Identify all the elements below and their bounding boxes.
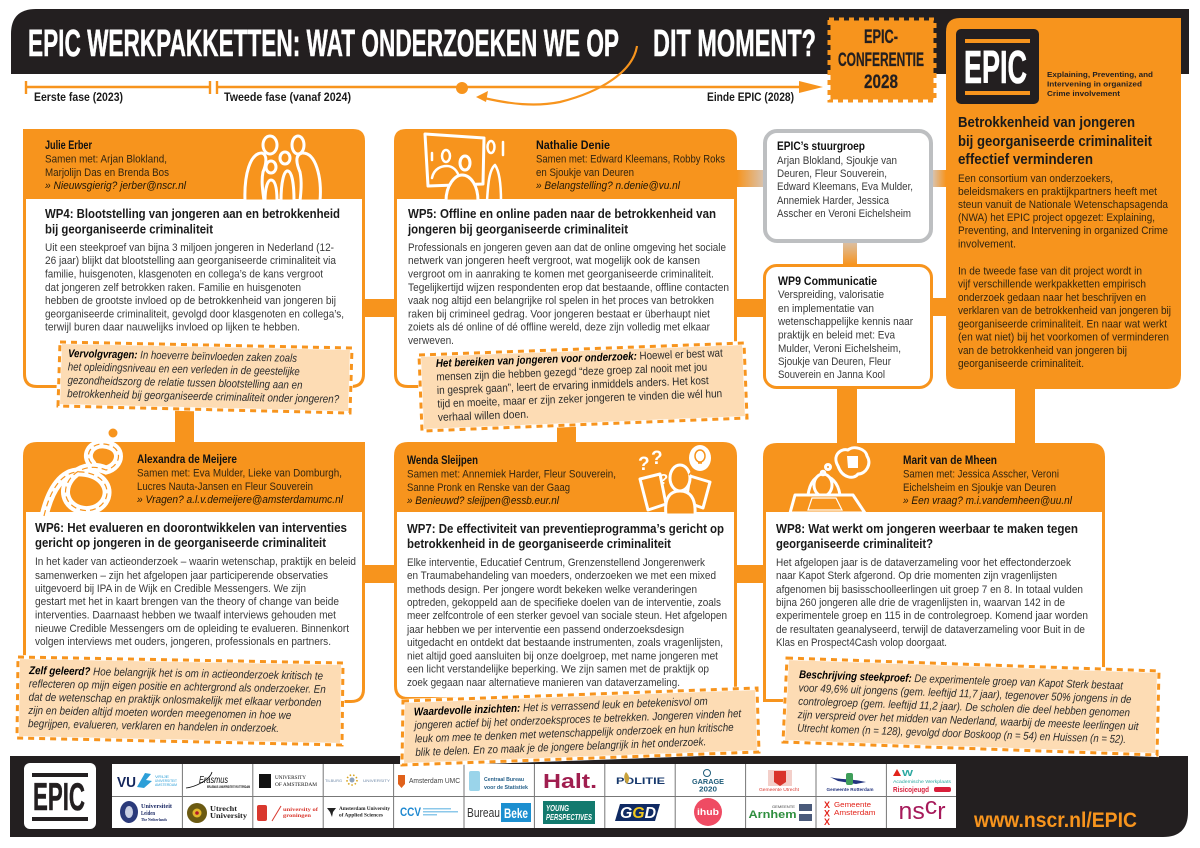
callout: WP7 valuable insights: blik te delen. En zo maak je de jongere belangrijk in het onderzoek. xyxy=(415,736,706,759)
footer bar xyxy=(10,756,1188,837)
logo: CBS: Centraal Bureau xyxy=(484,777,525,783)
conference box xyxy=(829,19,935,101)
label: second phase: Tweede fase (vanaf 2024) xyxy=(224,92,351,104)
WP4 text: familie, huisgenoten, klasgenoten en collega’s de kans vergroot xyxy=(45,269,324,281)
panel: steering group: Edward Kleemans, Eva Mulder, xyxy=(777,181,913,193)
logo: ihub: ihub xyxy=(697,807,720,817)
WP8 heading: WP8: Wat werkt om jongeren weerbaar te maken tegen xyxy=(776,521,1078,536)
logo: University of Groningen: university of xyxy=(283,807,318,813)
WP5 text: Professionals en jongeren geven aan dat de online omgeving het sociale xyxy=(408,242,726,254)
WP6 researcher xyxy=(137,454,343,506)
panel: WP9 communication: Verspreiding, valorisatie xyxy=(778,289,884,301)
logo: Bureau Beke xyxy=(467,803,531,822)
WP8 researcher xyxy=(903,455,1072,507)
panel: WP8 xyxy=(763,443,1105,702)
WP4 researcher xyxy=(45,140,186,192)
WP6 researcher: Samen met: Eva Mulder, Lieke van Domburgh, xyxy=(137,468,342,480)
panel: steering group: Deuren, Fleur Souverein, xyxy=(777,168,887,180)
conference box: 2028 xyxy=(864,71,898,93)
WP8 researcher: Marit van de Mheen xyxy=(903,455,997,467)
WP7 text: zoek gegaan naar alternatieve manieren van dataverzameling. xyxy=(407,677,680,689)
callout: WP4 follow-up questions: het opleidingsniveau en een verleden in de geestelijke xyxy=(68,361,300,378)
callout: WP4 follow-up questions xyxy=(58,342,352,413)
WP7 text: een licht verstandelijke beperking. We zijn samen met de praktijk op xyxy=(407,664,709,676)
logo: Halt: Halt. xyxy=(543,771,597,793)
conference box: CONFERENTIE xyxy=(838,49,924,71)
WP7 text: jaar hebben we per interventie een passend onderzoeksdesign xyxy=(406,624,684,636)
WP5 text: vaak nog altijd een belangrijke rol spelen in het proces van betrokken xyxy=(408,295,714,307)
WP6 heading xyxy=(35,520,347,550)
logo tagline: Intervening in organized xyxy=(1047,80,1142,88)
icon: group of young people xyxy=(245,136,320,201)
logo: CCV xyxy=(400,805,458,819)
logo: Gemeente Rotterdam xyxy=(826,773,874,792)
WP6 researcher: » Vragen? a.l.v.demeijere@amsterdamumc.nl xyxy=(137,494,343,506)
WP6 text: interventies. Daarnaast hebben we twaalf interviews gehouden met xyxy=(35,610,337,622)
logo: University of Groningen xyxy=(257,805,318,821)
callout: WP8 sample description: Utrecht komen (n = 128), gevolgd door Boskoop (n = 54) en Huissen (n = 52). xyxy=(797,723,1126,746)
logo: University of Amsterdam: OF AMSTERDAM xyxy=(275,782,317,788)
logo: VU: AMSTERDAM xyxy=(155,783,177,787)
logo: Leiden University xyxy=(120,801,172,823)
WP7 text: meer zelfcontrole of een sterker gevoel van sociale steun. Het afgelopen xyxy=(407,610,727,622)
WP5 heading: WP5: Offline en online paden naar de betrokkenheid van xyxy=(408,206,716,221)
WP4 researcher: Julie Erber xyxy=(45,140,92,152)
WP4 text: hebben de grootste invloed op de betrokkenheid van jongeren bij xyxy=(45,295,336,307)
callout: WP4 follow-up questions: betrokkenheid bij georganiseerde criminaliteit onder jongeren? xyxy=(67,388,340,406)
WP7 heading xyxy=(407,521,724,551)
WP4 researcher: Marjolijn Das en Brenda Bos xyxy=(45,167,169,179)
logo: Erasmus xyxy=(186,772,250,789)
WP4 researcher: » Nieuwsgierig? jerber@nscr.nl xyxy=(45,180,186,192)
logo: Utrecht University: Utrecht xyxy=(210,804,238,813)
WP8 text: bijna 260 jongeren alle drie de vragenlijsten in, waarvan 142 in de xyxy=(776,597,1065,609)
logo: Gemeente Amsterdam: X xyxy=(824,808,830,818)
intro text: georganiseerde criminaliteit. En naar wat werkt xyxy=(958,318,1168,330)
WP4 heading xyxy=(45,206,340,236)
logo: Gemeente Amsterdam xyxy=(824,800,876,827)
logo: Young Perspectives: YOUNG xyxy=(546,803,569,813)
WP5 text xyxy=(408,242,729,347)
WP4 text xyxy=(45,242,344,334)
callout: WP5 reaching young people: mensen zijn die hebben gezegd “deze groep zal nooit met jou xyxy=(436,362,707,383)
logo: Amsterdam UMC xyxy=(398,775,460,788)
logo: Gemeente Amsterdam: Gemeente xyxy=(834,800,871,809)
intro text: (en wat niet) bij het voorkomen of verminderen xyxy=(958,332,1169,344)
panel: steering group: EPIC’s stuurgroep xyxy=(777,141,865,153)
intro text: beleidsmakers en praktijkpartners heeft met xyxy=(958,186,1158,198)
title: EPIC WERKPAKKETTEN: WAT ONDERZOEKEN WE OP xyxy=(28,23,619,65)
icon: video call xyxy=(425,134,503,201)
logo: VU: UNIVERSITEIT xyxy=(155,779,178,783)
logo: Academische Werkplaats Risicojeugd: Academische Werkplaats xyxy=(893,779,952,784)
logo: Gemeente Utrecht xyxy=(759,770,800,793)
intro text: Preventing, and Intervening in organized Crime xyxy=(958,225,1168,237)
WP7 text: optreden, gekoppeld aan de specifieke doelen van de interventie, zoals xyxy=(407,597,721,609)
icon: person thinking of strength xyxy=(790,448,869,513)
WP8 text: de resultaten geanalyseerd, terwijl de dataverzameling voor Buit in de xyxy=(776,624,1085,636)
intro text: steun vanuit de Nationale Wetenschapsagenda xyxy=(958,199,1169,211)
logo: VU xyxy=(117,773,178,791)
logo: University of Amsterdam: UNIVERSITY xyxy=(275,775,306,781)
callout: WP6 lessons learned: Zelf geleerd? Hoe belangrijk het is om in actieonderzoek kritisch te xyxy=(28,665,323,683)
timeline: first phase line xyxy=(26,81,210,94)
WP8 text: Het afgelopen jaar is de dataverzameling voor het effectonderzoek xyxy=(776,557,1071,569)
panel: WP7 xyxy=(394,442,737,700)
WP6 text: In het kader van actieonderzoek – waarin wetenschap, praktijk en beleid xyxy=(35,556,356,568)
logo: Utrecht University: University xyxy=(210,811,247,820)
logo: ihub xyxy=(694,798,722,826)
logo: Young Perspectives xyxy=(543,801,595,824)
panel: project introduction xyxy=(946,18,1181,389)
WP4 heading: bij georganiseerde criminaliteit xyxy=(45,222,214,236)
callout: WP6 lessons learned: zijn en beiden altijd moeten worden meegenomen in hoe we xyxy=(27,705,291,722)
callout: WP6 lessons learned: dat de wetenschap en praktijk onlosmakelijk met elkaar verbonden xyxy=(28,692,322,709)
logo: Leiden University: Leiden xyxy=(141,811,156,817)
WP5 researcher xyxy=(536,140,725,192)
WP4 heading: WP4: Blootstelling van jongeren aan en betrokkenheid xyxy=(45,206,340,221)
WP6 heading: gericht op jongeren in de georganiseerde criminaliteit xyxy=(35,535,327,550)
logo: Bureau Beke: Bureau xyxy=(467,805,500,820)
intro heading: effectief verminderen xyxy=(958,152,1093,168)
logo: Young Perspectives: PERSPECTIVES xyxy=(546,812,592,822)
callout: WP6 lessons learned xyxy=(17,657,343,745)
callout: WP7 valuable insights: jongeren actief bij het onderzoeksproces te betrekken. Jongeren vinden het xyxy=(412,708,742,732)
logo: Gemeente Amsterdam: X xyxy=(824,800,830,810)
intro text: In de tweede fase van dit project wordt in xyxy=(958,266,1142,278)
WP6 text: uitgevoerd bij IPA in de Wijk en Credible Messengers. We zijn xyxy=(35,583,306,595)
WP5 text: netwerk van jongeren heeft vergroot, wat mogelijk ook de kansen xyxy=(408,255,700,267)
title: DIT MOMENT? xyxy=(653,23,816,65)
WP4 researcher: Samen met: Arjan Blokland, xyxy=(45,154,167,166)
panel: WP9 communication: wetenschappelijke kennis naar xyxy=(777,316,913,328)
WP8 text: experimentele groep en 115 in de controlegroep. Komend jaar worden xyxy=(776,610,1088,622)
callout: WP8 sample description: zijn verspreid over het midden van Nederland, waarbij de meeste leerlingen uit xyxy=(797,709,1139,733)
WP8 researcher: » Een vraag? m.i.vandemheen@uu.nl xyxy=(903,495,1072,507)
WP8 text: naar Kapot Sterk afgerond. Op drie momenten zijn vragenlijsten xyxy=(776,570,1057,582)
callout: WP4 follow-up questions: gezondheidszorg de relatie tussen blootstelling aan en xyxy=(67,375,303,392)
title bar xyxy=(11,9,1189,74)
intro text: verklaren van de betrokkenheid van jongeren bij xyxy=(958,305,1171,317)
WP8 heading: georganiseerde criminaliteit? xyxy=(776,536,933,551)
WP5 heading xyxy=(407,206,716,236)
WP5 researcher: en Sjoukje van Deuren xyxy=(536,167,634,179)
logo: Arnhem xyxy=(748,804,812,821)
logo: Bureau Beke: Beke xyxy=(504,805,528,821)
footer EPIC logo: EPIC xyxy=(33,776,85,819)
WP7 researcher xyxy=(407,455,616,507)
logo: Garage 2020 xyxy=(692,770,724,794)
panel: WP9 communication: Sjoukje van Deuren, Fleur xyxy=(778,356,891,368)
timeline: current moment dot xyxy=(456,82,468,94)
logo: GGD: GGD xyxy=(620,805,656,822)
icon: person with questions and idea: ? xyxy=(651,448,663,469)
callout: WP7 valuable insights: Waardevolle inzichten: Het is verrassend leuk en betekenisvol om xyxy=(414,696,708,718)
WP8 researcher: Samen met: Jessica Asscher, Veroni xyxy=(903,469,1059,481)
icon: looping road xyxy=(44,428,118,516)
WP6 text: gestart met het in kaart brengen van the theory of change van beide xyxy=(35,596,339,608)
intro text: involvement. xyxy=(958,238,1016,250)
logo: NSCR: ns xyxy=(898,798,924,825)
logo: Arnhem: Arnhem xyxy=(748,809,797,821)
panel: WP5 xyxy=(394,129,737,388)
WP6 text: nieuwe Credible Messengers om de opleiding te evalueren. Binnenkort xyxy=(35,623,350,635)
callout: WP8 sample description: controlegroep (gem. leeftijd 11,2 jaar). De scholen die deel hebben genomen xyxy=(798,696,1130,719)
callout: WP8 sample description: Beschrijving steekproef: De experimentele groep van Kapot Sterk bestaat xyxy=(799,669,1124,692)
WP6 researcher: Alexandra de Meijere xyxy=(137,454,237,466)
logo: Erasmus: Erasmus xyxy=(199,775,228,786)
logo: Erasmus: ERASMUS UNIVERSITEIT ROTTERDAM xyxy=(207,785,250,789)
logo: Amsterdam UMC: Amsterdam UMC xyxy=(409,776,460,785)
WP7 text: Elke interventie, Educatief Centrum, Grenzenstellend Jongerenwerk xyxy=(407,557,705,569)
logo: NSCR: c xyxy=(925,793,937,820)
logo: Tilburg University: UNIVERSITY xyxy=(363,779,391,783)
logo tagline: Explaining, Preventing, and xyxy=(1047,70,1153,79)
logo: Arnhem: GEMEENTE xyxy=(772,805,796,809)
panel: steering group: Annemiek Harder, Jessica xyxy=(777,195,890,207)
logo: Gemeente Amsterdam: Amsterdam xyxy=(834,808,876,817)
logo: CCV: CCV xyxy=(400,805,421,819)
intro text: (NWA) het EPIC project opgezet: Explaining, xyxy=(958,212,1155,224)
logo tagline: Crime involvement xyxy=(1047,89,1120,98)
WP7 researcher: Sanne Pronk en Renske van der Gaag xyxy=(407,482,570,494)
panel: WP6 xyxy=(23,428,365,703)
curved arrow head xyxy=(476,91,488,102)
WP7 researcher: Samen met: Annemiek Harder, Fleur Souverein, xyxy=(407,469,616,481)
callout: WP4 follow-up questions: Vervolgvragen: In hoeverre beïnvloeden zaken zoals xyxy=(68,348,297,365)
WP4 text: 26 jaar) blijkt dat blootstelling aan georganiseerde criminaliteit via xyxy=(45,255,337,267)
WP8 text: Klas en Prospect4Cash volop doorgaat. xyxy=(776,637,947,649)
WP4 text: georganiseerde criminaliteit, gevolgd door klasgenoten en collega’s, xyxy=(45,309,344,321)
WP5 researcher: » Belangstelling? n.denie@vu.nl xyxy=(536,180,680,192)
WP7 text: uitgedacht en ontdekt dat bestaande instrumenten, zoals vragenlijsten, xyxy=(407,637,723,649)
WP7 researcher: » Benieuwd? sleijpen@essb.eur.nl xyxy=(407,495,559,507)
panel: WP9 communication: en implementatie van xyxy=(778,303,874,315)
intro text: van de betrokkenheid van jongeren bij xyxy=(958,345,1127,357)
callout: WP6 lessons learned: begrijpen, evalueren, verklaren en handelen in onderzoek. xyxy=(28,718,279,735)
WP6 text xyxy=(35,556,356,648)
timeline: arrow head to conference xyxy=(799,81,823,93)
panel: steering group: Arjan Blokland, Sjoukje van xyxy=(777,155,897,167)
logo: Academische Werkplaats Risicojeugd: Risicojeugd xyxy=(893,787,929,794)
EPIC logo xyxy=(956,29,1039,104)
WP5 text: Tegelijkertijd wijzen respondenten erop dat bestaande, offline contacten xyxy=(408,282,729,294)
WP6 heading: WP6: Het evalueren en doorontwikkelen van interventies xyxy=(35,520,347,535)
WP6 text: volgen interviews met ouders, jongeren, professionals en partners. xyxy=(35,636,331,648)
callout: WP5 reaching young people: verhaal willen doen. xyxy=(438,409,529,424)
intro text: Een consortium van onderzoekers, xyxy=(958,173,1113,185)
callout: WP7 valuable insights xyxy=(402,688,759,765)
callout: WP5 reaching young people xyxy=(419,343,747,431)
WP7 text: en Traumabehandeling van moeders, onderzoeken we met een mixed xyxy=(407,570,716,582)
logo: Amsterdam University of Applied Sciences: of Applied Sciences xyxy=(339,814,383,818)
callout: WP8 sample description: voor 49,6% uit jongens (gem. leeftijd 11,7 jaar), tegenover 50% jongens in de xyxy=(798,682,1132,706)
website link: www.nscr.nl/EPIC xyxy=(973,809,1137,832)
EPIC logo: EPIC xyxy=(964,41,1027,93)
logo: VU: VU xyxy=(117,774,136,791)
callout: WP5 reaching young people: Het bereiken van jongeren voor onderzoek: Hoewel er best wat xyxy=(436,347,724,370)
logo: Politie xyxy=(616,772,665,787)
label: first phase: Eerste fase (2023) xyxy=(34,92,123,104)
logo: Utrecht University xyxy=(187,803,247,823)
logo: CBS: voor de Statistiek xyxy=(484,785,529,791)
logo: Gemeente Utrecht: Gemeente Utrecht xyxy=(759,787,800,793)
intro heading: Betrokkenheid van jongeren xyxy=(958,115,1135,131)
panel: WP9 communication xyxy=(764,266,932,388)
logo: Politie: POLITIE xyxy=(616,776,665,787)
panel: steering group xyxy=(765,131,931,241)
WP7 heading: WP7: De effectiviteit van preventieprogramma’s gericht op xyxy=(407,521,724,536)
logo: VU: VRIJE xyxy=(155,775,170,779)
WP5 text: zoiets als dé online of dé offline wereld, deze zijn volledig met elkaar xyxy=(408,322,710,334)
logo: Tilburg University: TILBURG xyxy=(325,779,342,783)
logo: Leiden University: Universiteit xyxy=(141,804,172,810)
panel: WP9 communication: Mulder, Veroni Eichelsheim, xyxy=(778,343,901,355)
timeline xyxy=(26,46,823,105)
WP5 researcher: Nathalie Denie xyxy=(536,140,610,152)
panel: steering group: Asscher en Veroni Eichelsheim xyxy=(777,208,911,220)
label: end: Einde EPIC (2028) xyxy=(707,92,794,104)
logo: Gemeente Rotterdam: Gemeente Rotterdam xyxy=(826,787,874,792)
WP6 researcher: Lucres Nauta-Jansen en Fleur Souverein xyxy=(137,481,313,493)
WP7 researcher: Wenda Sleijpen xyxy=(407,455,478,467)
WP5 heading: jongeren bij georganiseerde criminaliteit xyxy=(407,222,629,236)
curved arrow pointing to now xyxy=(484,46,637,105)
logo: Garage 2020: GARAGE xyxy=(692,777,724,786)
WP6 text: samenwerken – zijn het afgelopen jaar participerende observaties xyxy=(35,570,328,582)
intro heading xyxy=(958,115,1152,168)
logo: CBS xyxy=(469,771,529,791)
logo: Academische Werkplaats Risicojeugd: W xyxy=(902,769,914,778)
partner logos xyxy=(112,764,956,828)
connectors between panels xyxy=(175,170,1035,583)
conference box: EPIC- xyxy=(864,26,898,48)
footer EPIC logo xyxy=(24,763,96,829)
logo: Garage 2020: 2020 xyxy=(699,784,717,794)
logo: University of Groningen: groningen xyxy=(283,813,312,819)
logo: University of Amsterdam xyxy=(259,774,317,788)
callout: WP7 valuable insights: leuk om mee te denken met wetenschappelijk onderzoek en hun kritische xyxy=(415,722,734,745)
WP5 text: raken bij crimineel gedrag. Voor jongeren bestaat er überhaupt niet xyxy=(408,309,711,321)
WP4 text: terwijl buren daar nauwelijks invloed op lijken te hebben. xyxy=(45,322,300,334)
panel: WP9 communication: praktijk en beleid met: Eva xyxy=(778,330,896,342)
logo: Amsterdam University of Applied Sciences: Amsterdam University xyxy=(339,807,391,812)
intro text xyxy=(958,173,1171,370)
WP7 text: niet altijd goed aansluiten bij onze doelgroep, met name jongeren met xyxy=(407,650,719,662)
icon: person with questions and idea: ? xyxy=(659,471,668,488)
callout: WP5 reaching young people: tijd en moeite, maar er zijn zeker jongeren te vinden die wél hun xyxy=(437,388,722,410)
panel: WP9 communication: WP9 Communicatie xyxy=(778,276,877,288)
logo tagline xyxy=(1047,70,1153,98)
WP4 text: Uit een steekproef van bijna 3 miljoen jongeren in Nederland (12- xyxy=(45,242,334,254)
WP5 text: vergroot om in aanraking te komen met georganiseerde criminaliteit. xyxy=(408,269,714,281)
callout: WP8 sample description xyxy=(783,658,1159,755)
WP8 text: afgenomen bij basisschoolleerlingen uit groep 7 en 8. In totaal vulden xyxy=(776,584,1083,596)
WP7 text: methods design. Per jongere wordt bekeken welke veranderingen xyxy=(407,584,697,596)
WP7 heading: betrokkenheid in de georganiseerde criminaliteit xyxy=(407,536,672,551)
logo: Academische Werkplaats Risicojeugd xyxy=(893,769,952,794)
WP8 text xyxy=(776,557,1088,649)
logo: Amsterdam University of Applied Sciences xyxy=(327,807,391,818)
icon: person with questions and idea xyxy=(638,445,711,515)
intro text: georganiseerde criminaliteit. xyxy=(958,358,1084,370)
WP7 text xyxy=(406,557,727,689)
logo: Gemeente Amsterdam: X xyxy=(824,817,830,827)
intro text: onderzoek gedaan naar het beschrijven en xyxy=(958,292,1146,304)
WP5 researcher: Samen met: Edward Kleemans, Robby Roks xyxy=(536,154,725,166)
WP8 heading xyxy=(776,521,1078,551)
callout: WP5 reaching young people: in gesprek gaan”, leert de ervaring inmiddels anders. Het kost xyxy=(437,375,710,397)
WP8 researcher: Eichelsheim en Sjoukje van Deuren xyxy=(903,482,1056,494)
logo: Leiden University: The Netherlands xyxy=(141,818,168,822)
timeline: second phase line xyxy=(217,81,802,94)
panel: WP9 communication: Souverein en Janna Kool xyxy=(778,369,885,381)
callout: WP6 lessons learned: reflecteren op mijn eigen positie en achtergrond als onderzoeker. En xyxy=(29,678,326,696)
WP5 text: verweven. xyxy=(408,335,454,347)
intro text: vijf verschillende werkpakketten empirisch xyxy=(958,278,1146,290)
WP4 text: dat jongeren zelf betrokken raken. Familie en huisgenoten xyxy=(45,282,301,294)
logo: Tilburg University xyxy=(325,775,391,785)
icon: person with questions and idea: ? xyxy=(638,454,650,475)
logo: NSCR: r xyxy=(937,798,946,825)
panel: WP4 xyxy=(23,129,365,388)
intro heading: bij georganiseerde criminaliteit xyxy=(958,134,1152,150)
